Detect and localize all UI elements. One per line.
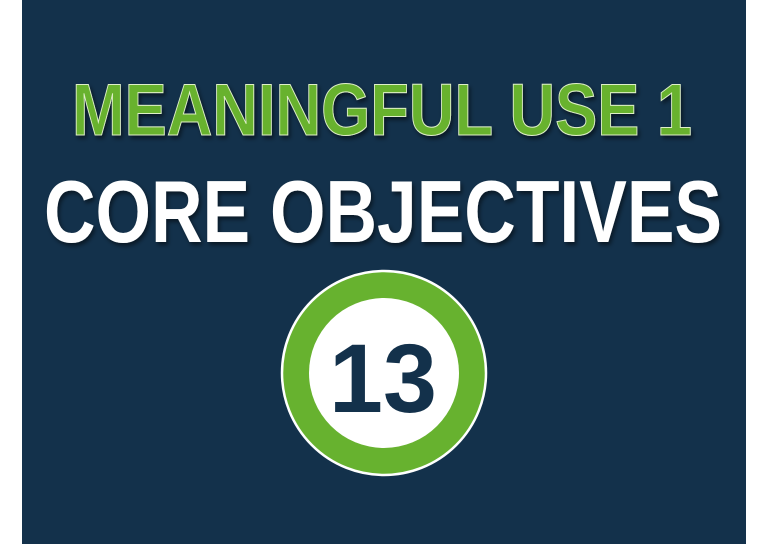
- title: meaningful use 1: MEANINGFUL USE 1: [72, 70, 692, 151]
- badge: 13: 13: [329, 324, 437, 433]
- badge: 13: [282, 271, 486, 475]
